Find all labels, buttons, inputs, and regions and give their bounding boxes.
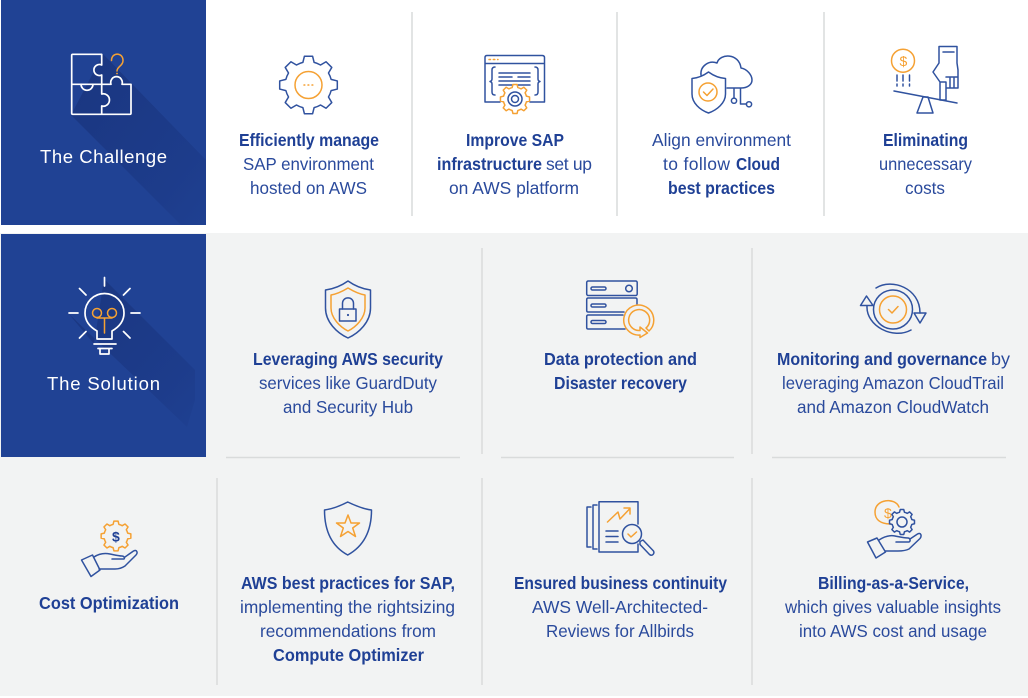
- text: Monitoring and governance: leveraging Amazon CloudTrail: [782, 373, 1004, 393]
- text: Ensured business continuity: [514, 573, 727, 641]
- text: Efficiently manage: Efficiently manage: [239, 130, 379, 150]
- icon: hand on seesaw with coin: $: [900, 53, 908, 69]
- panel: Data protection: [544, 281, 697, 393]
- panel: Monitoring and governance: [777, 284, 1010, 417]
- icon: browser window with gear: [485, 56, 544, 114]
- text: AWS best practices: implementing the rightsizing: [240, 597, 455, 617]
- icon: gear: [280, 56, 337, 114]
- panel: Eliminating costs: [879, 46, 972, 198]
- text: Billing-as-a-Service: into AWS cost and usage: [799, 621, 987, 641]
- text: AWS best practices: [240, 573, 455, 665]
- text: Leveraging AWS security: services like GuardDuty: [259, 373, 437, 393]
- text: Ensured business continuity: AWS Well-Architected-: [532, 597, 708, 617]
- text: Billing-as-a-Service: [784, 573, 1001, 641]
- heading: The Solution: The Solution: [47, 373, 160, 394]
- icon: server with recovery ring: [587, 281, 654, 338]
- text: Improve SAP infrastructure: on AWS platform: [449, 178, 579, 198]
- text: Efficiently manage: [239, 130, 379, 198]
- icon: hand with coin and gear: $: [884, 505, 892, 521]
- text: Align environment: Align environment: [652, 130, 791, 150]
- text: Billing-as-a-Service: Billing-as-a-Service,: [818, 573, 969, 593]
- text: Ensured business continuity: Reviews for Allbirds: [546, 621, 694, 641]
- icon: puzzle with question mark: [72, 54, 131, 114]
- text: Align environment: Cloud: [736, 154, 780, 174]
- icon: shield with star: [324, 502, 372, 555]
- text: Leveraging AWS security: and Security Hub: [283, 397, 413, 417]
- text: Leveraging AWS security: [253, 349, 443, 417]
- text: Cost Optimization: Cost Optimization: [39, 593, 179, 613]
- icon: monitoring cycle: [860, 284, 926, 333]
- panel: Leveraging AWS security: [253, 281, 443, 417]
- text: Monitoring and governance: and Amazon CloudWatch: [797, 397, 989, 417]
- panel: Ensured business continuity: [514, 502, 727, 641]
- panel: The Challenge: [1, 0, 206, 225]
- panel: AWS best practices: [240, 502, 455, 665]
- panel: Efficiently manage: [239, 56, 379, 198]
- panel: Billing-as-a-Service: [784, 501, 1001, 641]
- text: Ensured business continuity: Ensured business continuity: [514, 573, 727, 593]
- text: Monitoring and governance: Monitoring and governance: [777, 349, 987, 369]
- panel: The Solution: [1, 234, 206, 457]
- text: Improve SAP infrastructure: [437, 130, 592, 198]
- panel: Cost Optimization: [39, 521, 179, 613]
- text: Efficiently manage: SAP environment: [243, 154, 374, 174]
- text: Align environment: to follow: [663, 154, 730, 174]
- icon: hand with coin and gear: [868, 501, 921, 558]
- panel: Align environment: [652, 56, 791, 198]
- text: Improve SAP infrastructure: Improve SAP: [466, 130, 564, 150]
- text: AWS best practices: AWS best practices for SAP,: [241, 573, 455, 593]
- text: Efficiently manage: hosted on AWS: [250, 178, 367, 198]
- icon: hand on seesaw with coin: [892, 46, 958, 113]
- icon: report with magnifier: [587, 502, 654, 555]
- icon: shield and cloud: [692, 56, 752, 113]
- text: Eliminating unnecessary costs: [879, 130, 972, 198]
- icon: hand with dollar gear: $: [112, 528, 120, 544]
- text: Monitoring and governance: [777, 349, 1010, 417]
- text: AWS best practices: Compute Optimizer: [273, 645, 424, 665]
- text: Billing-as-a-Service: which gives valuable insights: [784, 597, 1001, 617]
- heading: The Challenge: The Challenge: [40, 146, 167, 167]
- text: Data protection: Data protection and: [544, 349, 697, 369]
- text: Leveraging AWS security: Leveraging AWS security: [253, 349, 443, 369]
- text: Align environment: [652, 130, 791, 198]
- text: Data protection: [544, 349, 697, 393]
- text: Improve SAP infrastructure: set up: [546, 154, 592, 174]
- text: Eliminating unnecessary costs: unnecessary: [879, 154, 972, 174]
- text: Eliminating unnecessary costs: Eliminating: [883, 130, 968, 150]
- panel: Improve SAP infrastructure: [437, 56, 592, 198]
- icon: light bulb: [69, 278, 140, 354]
- text: Improve SAP infrastructure: infrastructure: [437, 154, 542, 174]
- text: Monitoring and governance: by: [991, 349, 1010, 369]
- icon: shield with lock: [326, 281, 370, 338]
- text: Align environment: best practices: [668, 178, 775, 198]
- text: AWS best practices: recommendations from: [260, 621, 436, 641]
- text: Eliminating unnecessary costs: costs: [905, 178, 945, 198]
- text: Data protection: Disaster recovery: [554, 373, 687, 393]
